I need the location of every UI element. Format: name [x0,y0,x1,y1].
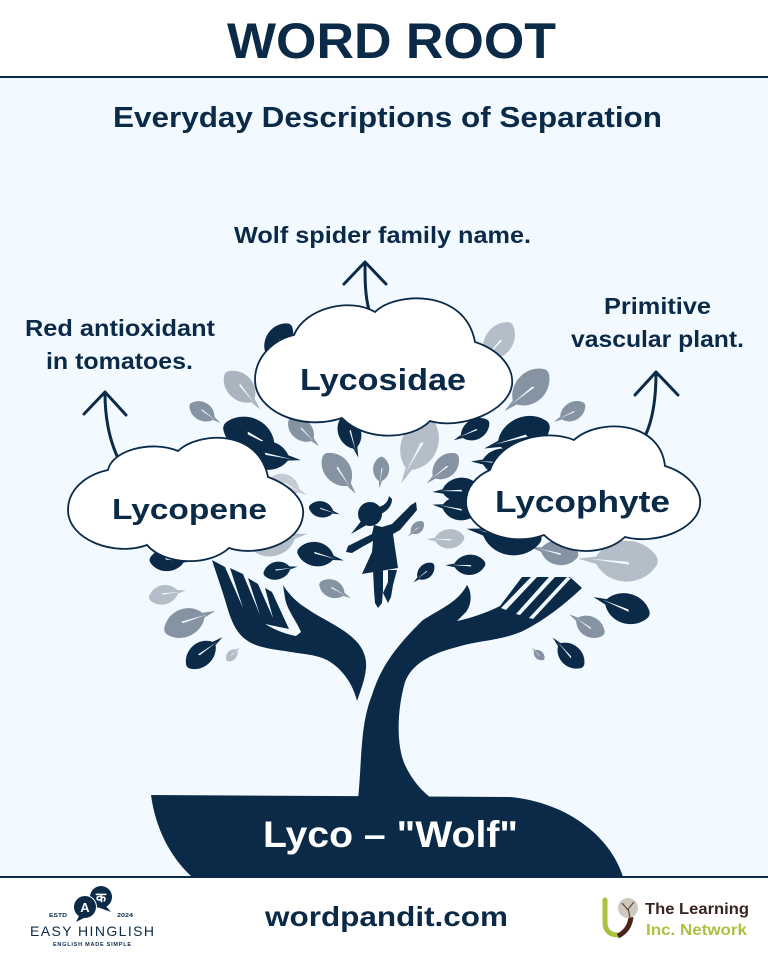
cloud: Lycosidae: Lycosidae [300,362,466,397]
title banner: WORD ROOT [227,13,556,69]
cloud: Lycophyte [466,426,700,551]
title banner [0,0,768,77]
logo: Easy Hinglish [30,886,154,948]
logo: The Learning Inc. Network: The Learning [645,901,749,918]
subtitle: Everyday Descriptions of Separation [113,102,662,134]
arrow: Lycophyte to definition [635,372,678,434]
arrow: Lycosidae to definition [344,262,386,310]
left hand [212,560,366,701]
logo: The Learning Inc. Network: Inc. Network [646,922,747,939]
definition: Lycophyte [571,293,744,352]
definition: Lycopene [25,315,215,374]
cloud: Lycosidae [255,298,512,436]
definition: Lycophyte: vascular plant. [571,326,744,352]
website url: wordpandit.com [264,901,508,932]
ground root base [151,795,623,877]
logo: Easy Hinglish: 2024 [117,913,133,919]
logo: Easy Hinglish: ENGLISH MADE SIMPLE [53,942,131,948]
ground root base: Lyco – "Wolf" [263,814,518,855]
definition: Lycopene: Red antioxidant [25,315,215,341]
logo: Easy Hinglish: EASY HINGLISH [30,923,154,939]
definition: Lycosidae: Wolf spider family name. [234,222,531,248]
footer bar [0,877,768,960]
definition: Lycophyte: Primitive [604,293,711,319]
cloud: Lycopene: Lycopene [112,494,267,526]
logo: Easy Hinglish: क [95,891,107,906]
definition: Lycopene: in tomatoes. [46,348,193,374]
logo: Easy Hinglish: A [80,900,90,915]
cloud: Lycophyte: Lycophyte [495,484,670,519]
cloud: Lycopene [68,438,303,561]
leaves canopy [147,315,658,676]
logo: The Learning Inc. Network [605,898,749,939]
child silhouette [346,496,417,608]
logo: Easy Hinglish: ESTD [49,913,68,919]
tree trunk with right hand [358,577,582,800]
arrow: Lycopene to definition [84,392,126,456]
